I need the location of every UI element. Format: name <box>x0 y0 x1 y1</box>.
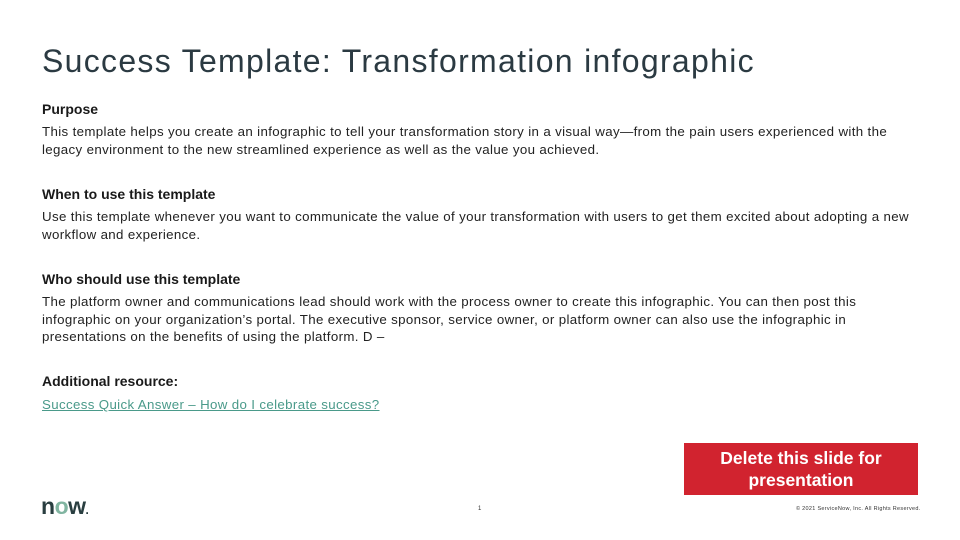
link: Success Quick Answer – How do I celebrate success? <box>42 397 380 412</box>
callout: delete slide <box>684 443 918 495</box>
text: who should use: The platform owner and communications lead should work with the process owner to create this infographic. You can then post this infographic on your organization’s portal. The executive sponsor, service owner, or platform owner can also use the infographic in presentations on the benefits of using the platform. D – <box>42 294 856 344</box>
text: when to use: Use this template whenever you want to communicate the value of your transformation with users to get them excited about adopting a new workflow and experience. <box>42 209 909 242</box>
callout: delete slide: Delete this slide for <box>720 448 882 468</box>
heading: when to use: When to use this template <box>42 186 215 202</box>
title: Success Template: Transformation infographic <box>42 43 755 79</box>
text: purpose: This template helps you create an infographic to tell your transformation story in a visual way—from the pain users experienced with the legacy environment to the new streamlined experience as well as the value you achieved. <box>42 124 887 156</box>
page number: 1 <box>478 506 481 512</box>
logo: now: now. <box>41 493 88 519</box>
copyright: © 2021 ServiceNow, Inc. All Rights Reserved. <box>796 506 921 512</box>
heading: additional resource: Additional resource: <box>42 373 178 389</box>
callout: delete slide: presentation <box>748 470 854 490</box>
heading: who should use: Who should use this template <box>42 271 240 287</box>
heading: purpose: Purpose <box>42 101 98 117</box>
